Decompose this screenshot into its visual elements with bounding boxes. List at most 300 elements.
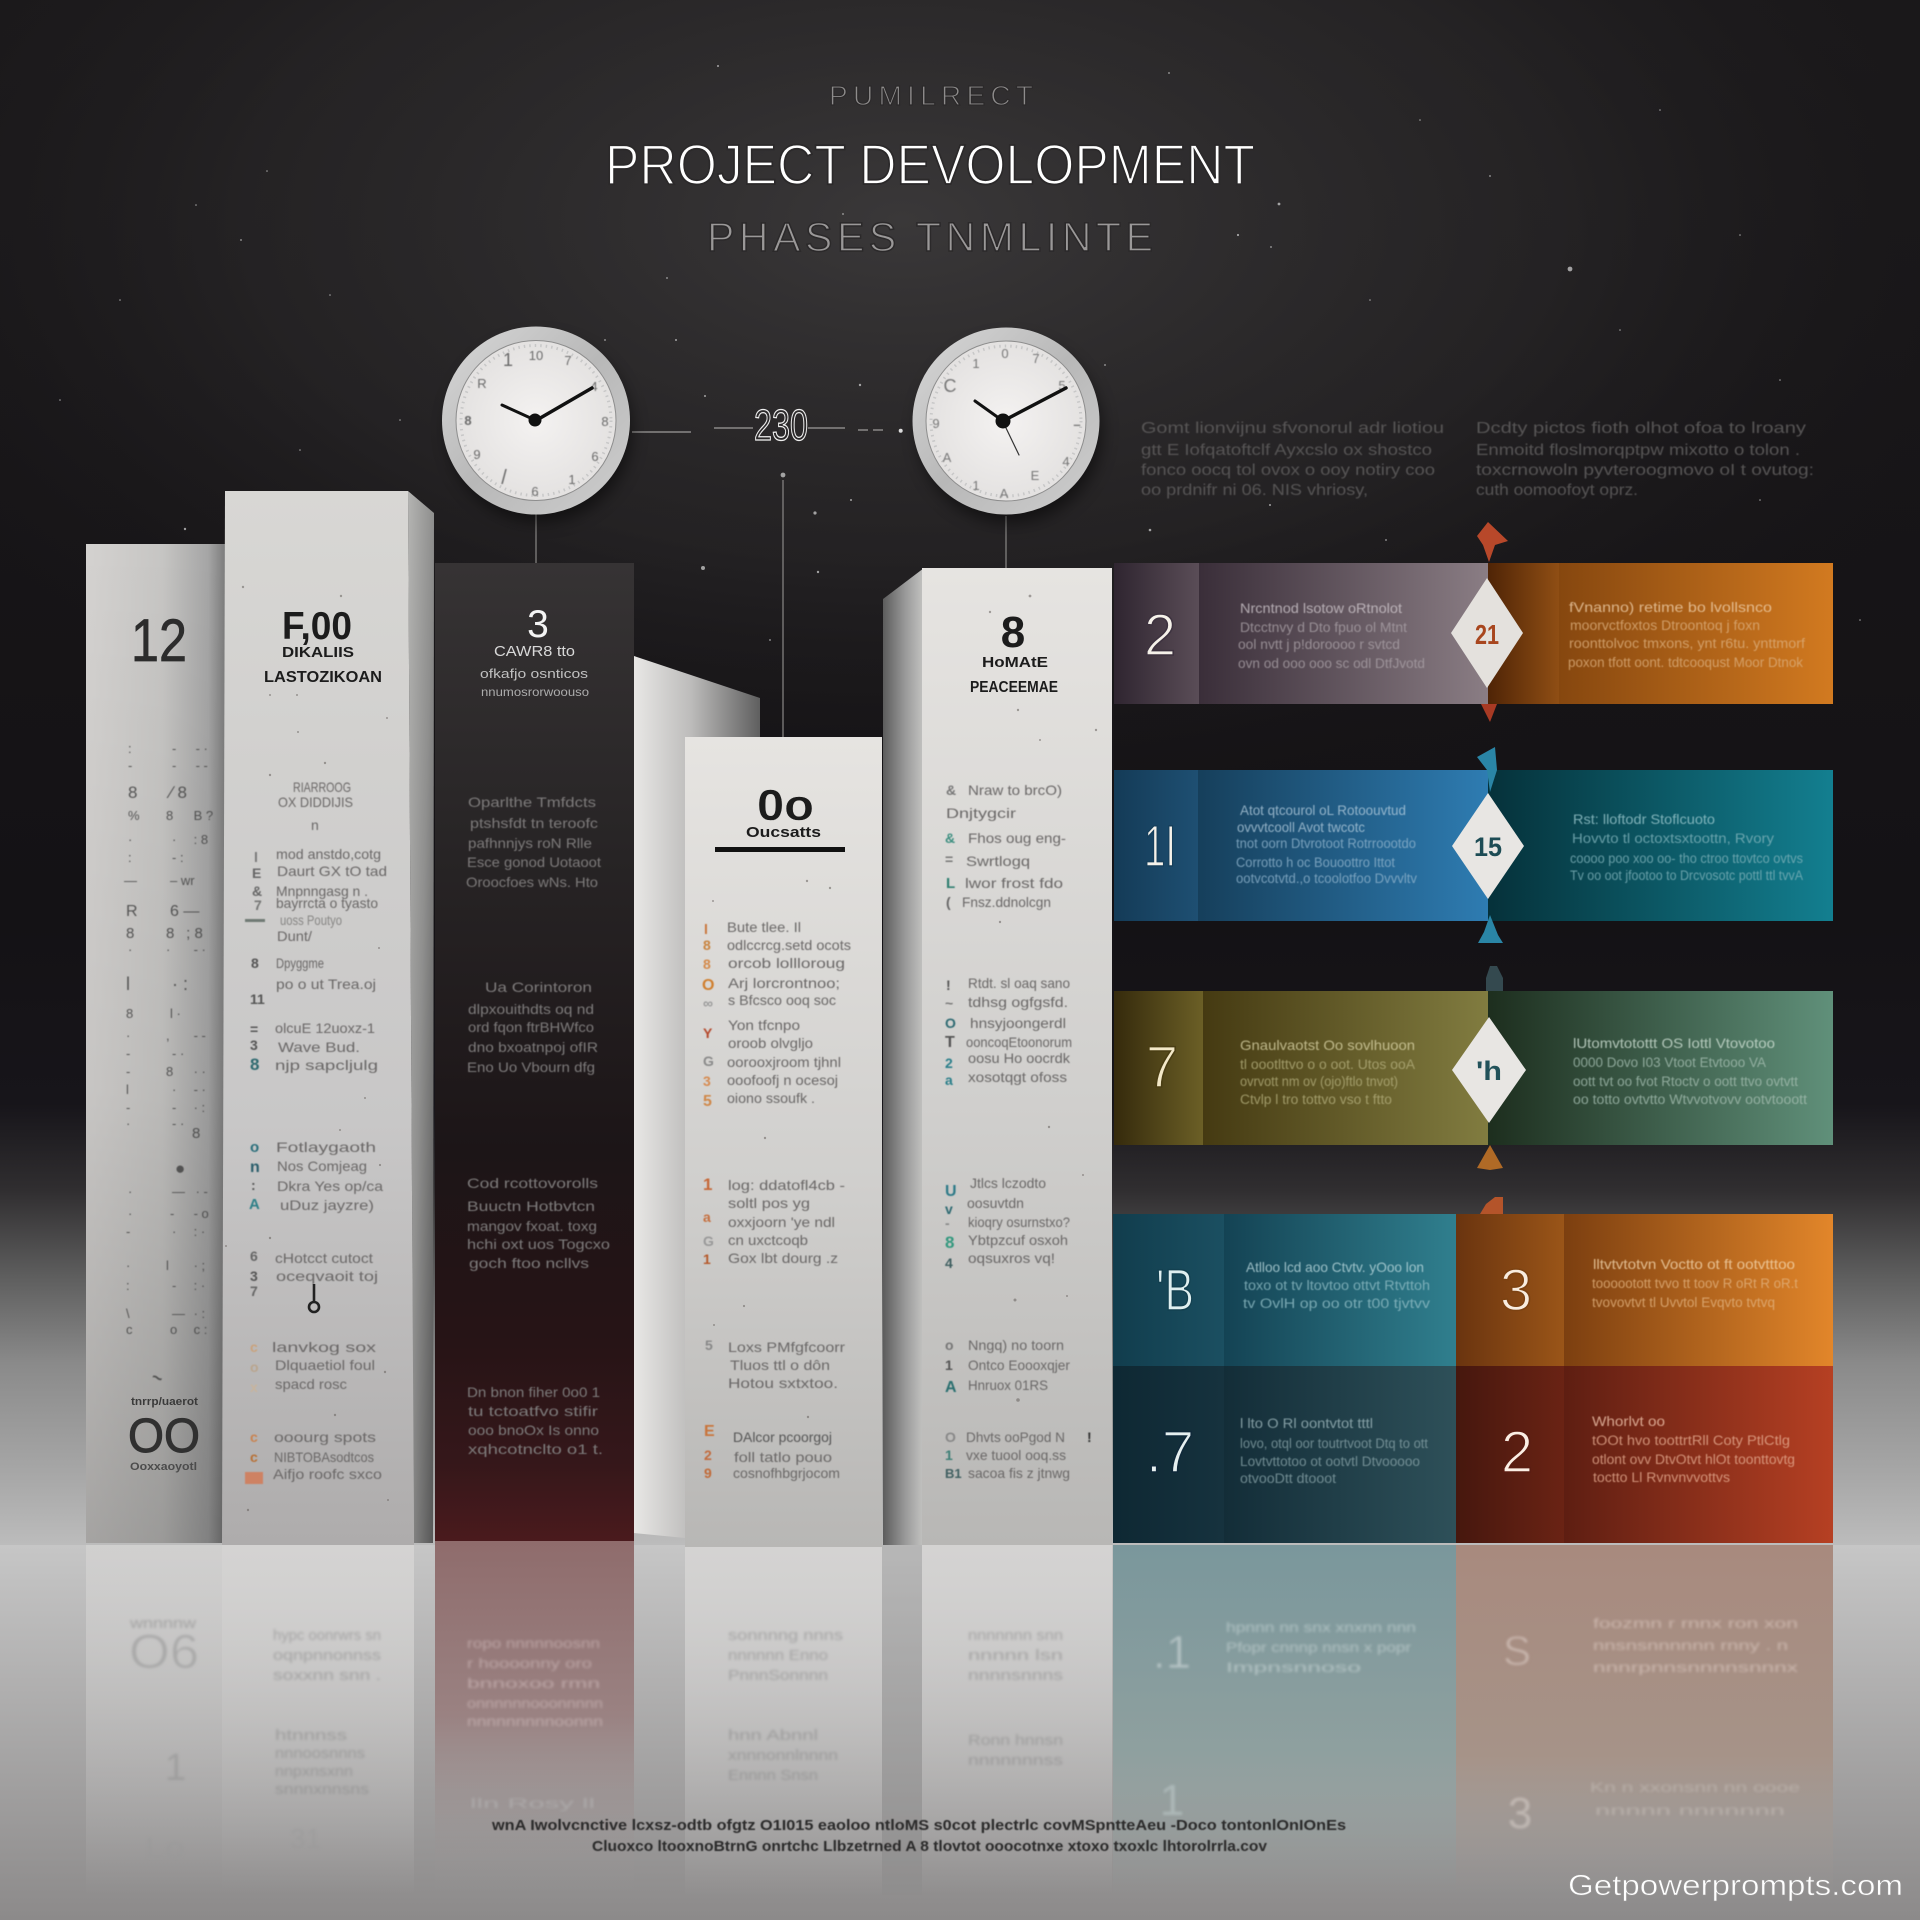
column 1 marks: R 6 — (126, 903, 199, 920)
column 4 markers: 2 (704, 1447, 712, 1463)
column 5 markers: A (945, 1379, 957, 1396)
row 2 right text: coooo poo xoo oo- tho ctroo ttovtco ovtvs (1570, 851, 1803, 866)
reflected text (129, 1615, 1800, 1865)
reflected text: sonnnng nnns (728, 1627, 843, 1644)
column 2 list: bayrrcta o tyasto (276, 895, 378, 911)
intro text: left: Gomt lionvijnu sfvonorul adr liotiou (1141, 420, 1444, 437)
column 2 markers: o (250, 1359, 259, 1375)
column 4 list: Gox lbt dourg .z (728, 1250, 838, 1266)
column 5 markers: 1 (945, 1357, 953, 1373)
column 5 list: Ontco Eoooxqjer (968, 1357, 1070, 1373)
column 4 markers: l (704, 921, 708, 937)
column 4 markers: 1 (703, 1175, 712, 1194)
intro text: right: Enmoitd floslmorqptpw mixotto o tolon . (1476, 442, 1800, 459)
reflected text: Kn n xxonsnn nn oooe (1590, 1779, 1800, 1795)
column 5 markers: ~ (945, 995, 953, 1011)
reflected text: nnnnnnn snn (968, 1627, 1063, 1644)
column 3 paragraphs: Buuctn Hotbvtcn (467, 1198, 595, 1214)
column 5 markers: ! (946, 977, 951, 993)
row 3 left text: ovrvott nm ov (ojo)ftlo tnvot) (1240, 1074, 1398, 1089)
column 2 markers: 3 (250, 1037, 258, 1053)
column 2 heading (264, 605, 382, 686)
column 5 heading: 8 (1001, 608, 1025, 657)
column 1 marks: l · : (126, 974, 188, 994)
column 4 markers: G (703, 1053, 714, 1069)
reflected text: ropo nnnnnoosnn (467, 1635, 600, 1651)
column 2 markers: = (250, 1021, 258, 1037)
panel: row 2 blue and teal (1114, 747, 1833, 943)
column 2 markers: c (250, 1339, 258, 1355)
column 5 markers: o (945, 1337, 954, 1353)
intro text: left: gtt E Iofqatoftclf Ayxcslo ox shostco (1141, 442, 1432, 459)
reflected text: wnnnnw (129, 1615, 196, 1632)
column 2 list: Dlquaetiol foul (275, 1357, 375, 1373)
column 5 list: oosu Ho oocrdk (968, 1050, 1071, 1066)
footer caption: Cluoxco ltooxnoBtrnG onrtchc Llbzetrned A 8 tlovtot ooocotnxe xtoxo txoxlc lhtorolrrla.cov (592, 1838, 1268, 1855)
cell: dark teal: .7 (1146, 1420, 1194, 1485)
column 2 list (272, 779, 387, 1482)
panel: column 5 (883, 568, 1112, 1545)
column 5 list: oosuvtdn (967, 1195, 1024, 1211)
clock 1 numerals: 4 (590, 379, 598, 394)
icon: thermometer (309, 1284, 319, 1312)
clock 2 numerals: E (1031, 468, 1040, 483)
cell: orange: lltvtvtotvn Voctto ot ft ootvtttoo (1593, 1256, 1795, 1272)
reflected text: Ennnn Snsn (728, 1767, 818, 1784)
column 5 markers: O (945, 1429, 956, 1445)
column 5 list: Dhvts ooPgod N (966, 1429, 1065, 1445)
clock 2 (912, 328, 1102, 523)
column 5 list: Swrtlogq (966, 853, 1030, 869)
panel: row 3 olive and green (1114, 991, 1833, 1170)
column 4 list (727, 919, 851, 1481)
column 4 list: oorooxjroom tjhnl (727, 1054, 841, 1070)
clock 2 numerals: 1 (972, 478, 980, 493)
column 1 marks: % 8 B ? (128, 808, 213, 823)
footer caption: wnA Iwolvcnctive lcxsz-odtb ofgtz O1I015 eaoloo ntloMS s0cot plectrlc covMSpntteAeu -Doco tontonlOnIOnEs (491, 1817, 1346, 1834)
column 3 paragraphs: Eno Uo Vbourn dfg (467, 1059, 595, 1075)
reflected text: nnnnnnnnnoonnn (467, 1713, 603, 1729)
column 1 marks: 8 ∕ 8 (128, 783, 187, 802)
clock 1 numerals: R (477, 376, 487, 391)
column 5 markers: 2 (945, 1055, 953, 1071)
column 4 list: foll tatlo pouo (734, 1449, 832, 1465)
row 2 left text: ootvcotvtd.,o tcoolotfoo Dvvvltv (1236, 871, 1417, 886)
column 1 marks: ~ (149, 1367, 166, 1389)
intro text: right (1476, 420, 1814, 499)
column 4 markers: G (703, 1233, 714, 1249)
row 3 diamond (1452, 1017, 1526, 1123)
column 3 paragraphs: mangov fxoat. toxg (467, 1218, 597, 1234)
column 4 list: Arj lorcrontnoo; (728, 975, 840, 991)
column 2 list: cHotcct cutoct (275, 1250, 373, 1266)
column 3 heading: CAWR8 tto (494, 643, 575, 660)
row 1 diamond: 21 (1475, 619, 1499, 650)
column 4 list: Hotou sxtxtoo. (728, 1375, 838, 1391)
reflected text: soxxnn snn . (273, 1667, 381, 1684)
column 2 list: Dkra Yes op/ca (277, 1178, 383, 1194)
column 1 marks: - - · : (126, 1100, 205, 1115)
column 5 list: Fnsz.ddnolcgn (962, 894, 1051, 910)
column 5 list: Ybtpzcuf osxoh (968, 1232, 1068, 1248)
row 2 left text: ovvvtcooll Avot twcotc (1237, 819, 1365, 835)
clock 1 numerals: / (501, 467, 507, 489)
column 1 marks: - · : · (126, 1224, 205, 1239)
column 5 list: lwor frost fdo (965, 875, 1063, 891)
column 5 markers: 1 (945, 1447, 953, 1463)
column 1 marks: · , - - (126, 1028, 206, 1043)
icon: arrow tips row 1 (1477, 522, 1508, 722)
column 1 marks: : - : · (126, 1278, 205, 1293)
column 1 footer: Ooxxaoyotl (130, 1461, 197, 1473)
paper speckles (225, 586, 1097, 1511)
column 4 list: oxxjoorn 'ye ndl (728, 1214, 835, 1230)
column 2 markers: n (250, 1159, 260, 1176)
column 2 markers (245, 849, 265, 1484)
panel: column 4 (685, 737, 882, 1547)
panel: column 1 (86, 544, 225, 1543)
column 3 paragraphs: Esce gonod Uotaoot (467, 854, 601, 870)
row 1 right text: fVnanno) retime bo lvollsnco (1569, 599, 1772, 615)
column 2 markers: E (252, 865, 261, 881)
clock 2 numerals: A (1000, 486, 1009, 501)
cell: red: toctto Ll Rvnvnvvottvs (1593, 1470, 1730, 1485)
row 3 number: 7 (1146, 1035, 1178, 1100)
clock 1 numerals: 1 (568, 472, 576, 487)
column 3 heading (480, 603, 589, 699)
column 5 markers: L (946, 875, 955, 892)
column 5 markers: v (945, 1201, 953, 1217)
reflected text: foozmn r rnnx ron xon (1593, 1615, 1798, 1631)
reflected text: oqnpnnonnss (273, 1647, 381, 1664)
title: PROJECT DEVOLOPMENT (605, 133, 1255, 197)
cell: red (1456, 1366, 1833, 1543)
row 2 left text (1236, 802, 1417, 886)
column 2 list: ooourg spots (274, 1429, 376, 1445)
column 2 heading: LASTOZIKOAN (264, 669, 382, 686)
column 2 list: Aifjo roofc sxco (273, 1466, 382, 1482)
row 3 right text: 0000 Dovo I03 Vtoot Etvtooo VA (1573, 1055, 1766, 1070)
column 2 markers: o (250, 1139, 259, 1156)
column 5 markers: 8 (945, 1233, 954, 1252)
clock 1 hands (502, 388, 592, 426)
row 3 left text: Ctvlp l tro tottvo vso t ftto (1240, 1092, 1392, 1107)
column 3 paragraphs (466, 794, 610, 1457)
reflected text: onnnnnnooonnnnn (467, 1695, 603, 1711)
column 2 list: RIARROOG (293, 779, 351, 795)
column 2 list: po o ut Trea.oj (276, 976, 376, 992)
row 3 right text: oo totto ovtvtto Wtvvotvovv ootvtooott (1573, 1092, 1807, 1107)
column 4 markers: a (703, 1209, 711, 1225)
reflected text: hypc oonrwrs sn (273, 1627, 381, 1644)
intro text: right: toxcrnowoln pyvteroogmovo oI t ovutog: (1476, 462, 1814, 479)
column 5 list: Jtlcs lczodto (970, 1175, 1046, 1191)
column 3 paragraphs: Oroocfoes wNs. Hto (466, 874, 598, 890)
column 3 heading: nnumosrorwoouso (481, 685, 589, 699)
clock 2 numerals: C (944, 376, 956, 396)
column 4 list: ooofoofj n ocesoj (727, 1072, 838, 1088)
column 5 list: tdhsg ogfgsfd. (968, 994, 1068, 1010)
column 2 list: lanvkog sox (272, 1339, 376, 1355)
reflection (86, 1541, 1833, 1897)
column 5 list: Fhos oug eng- (968, 830, 1066, 846)
column 1 marks: - - - - (128, 758, 208, 773)
column 1 marks: : - : (128, 850, 184, 865)
column 5 list: Dnjtygcir (946, 805, 1016, 821)
column 5 list: Rtdt. sl oaq sano (968, 975, 1070, 991)
reflected text: O6 (129, 1626, 199, 1679)
column 5 markers: B1 (945, 1466, 962, 1481)
column 1 marks: · - · (126, 1116, 184, 1131)
row 2 left text: Atot qtcourol oL Rotoouvtud (1240, 802, 1406, 818)
row 2 right text: Rst: lloftodr Stoflcuoto (1573, 811, 1715, 827)
panel: column 3 (435, 563, 634, 1541)
column 5 list: ooncoqEtoonorum (966, 1034, 1072, 1050)
row 3 right text: lUtomvtotottt OS Iottl Vtovotoo (1573, 1035, 1775, 1051)
clock 2 numerals (932, 346, 1081, 501)
column 4 markers: 3 (703, 1073, 711, 1089)
cell: dark teal: l lto O Rl oontvtot tttl (1240, 1415, 1373, 1431)
clock 2 numerals: – (1073, 417, 1081, 432)
column 3 heading: ofkafjo osnticos (480, 666, 589, 681)
column 5 list: Hnruox 01RS (968, 1377, 1048, 1393)
reflected text: 1 (165, 1747, 186, 1789)
row 1 left text: Dtcctnvy d Dto fpuo ol Mtnt (1240, 620, 1407, 635)
column 1 marks: - - · (126, 1046, 184, 1061)
clock 1 numerals: 8 (464, 413, 472, 428)
row 2 right text (1570, 811, 1803, 883)
column 2 list: njp sapcljulg (275, 1057, 378, 1073)
reflected text: lln Rosy ll (470, 1795, 595, 1811)
column 2 markers: 8 (251, 955, 259, 971)
column 1 marks: 8 (192, 1125, 200, 1142)
column 2 markers: 8 (250, 1055, 259, 1074)
column 5 markers: - (945, 1215, 950, 1231)
column 1 marks: — – wr (124, 873, 195, 888)
reflected text: Pfopr cnnnp nnsn x popr (1226, 1639, 1411, 1655)
column 5 markers: 4 (945, 1255, 953, 1271)
column 5 list: Nraw to brcO) (968, 782, 1062, 798)
column 5 list: kioqry osurnstxo? (968, 1214, 1070, 1230)
reflected text: 3 (1508, 1789, 1532, 1838)
column 4 list: cosnofhbgrjocom (733, 1465, 840, 1481)
column 5 markers: & (946, 782, 956, 798)
reflected text: nnnoosnnns (275, 1745, 365, 1762)
reflected text: hpnnn nn snx xnxnn nnn (1226, 1619, 1416, 1635)
column 4 heading: 0o (757, 781, 814, 830)
clock 1 numerals: 7 (564, 353, 572, 368)
cell: teal: Atlloo lcd aoo Ctvtv. yOoo lon (1246, 1259, 1424, 1275)
watermark: Getpowerprompts.com (1568, 1870, 1903, 1902)
column 4 list: DAlcor pcoorgoj (733, 1429, 832, 1445)
cell: red: Whorlvt oo (1592, 1413, 1665, 1429)
panel: column 2 (222, 491, 434, 1545)
column 2 list: Wave Bud. (278, 1039, 360, 1055)
column 4 list: Yon tfcnpo (728, 1017, 800, 1033)
intro text: left: oo prdnifr ni 06. NIS vhriosy, (1141, 482, 1368, 499)
cell: teal: 'B (1156, 1258, 1194, 1323)
row 3 right text: oott tvt oo fvot Rtoctv o oott ttvo ovtvtt (1573, 1074, 1798, 1089)
reflected text: snnnxnnsns (275, 1781, 369, 1798)
column 2 markers: & (252, 883, 262, 899)
cell: teal: toxo ot tv ltovtoo ottvt Rtvttoh (1244, 1278, 1430, 1293)
column 1 marks: : - - · (128, 741, 208, 756)
column 2 list: Dpyggme (276, 955, 324, 971)
column 5 heading (970, 608, 1058, 696)
row 2 diamond: 15 (1474, 832, 1502, 862)
footer caption (491, 1817, 1346, 1855)
column 3 paragraphs: dlpxouithdts oq nd (468, 1001, 594, 1017)
reflected text: PnnnSonnnn (728, 1667, 828, 1684)
column 1 marks: ● (175, 1159, 185, 1178)
row 1 number: 2 (1144, 603, 1176, 668)
column 3 paragraphs: ptshsfdt tn teroofc (470, 815, 598, 831)
row 2 left text: tnot oorn Dtvrotoot Rotrroootdo (1236, 836, 1416, 851)
timeline connectors (536, 428, 1006, 737)
icon: arrow tips row 2 (1477, 747, 1503, 943)
column 3 paragraphs: pafhnnjys roN Rlle (468, 835, 592, 851)
cell: orange (1456, 1214, 1833, 1366)
row 1 left text: Nrcntnod lsotow oRtnolot (1240, 600, 1402, 616)
column 2 list: Nos Comjeag (277, 1158, 367, 1174)
column 3 paragraphs: ooo bnoOx Is onno (468, 1422, 599, 1438)
column 5 heading: PEACEEMAE (970, 679, 1058, 696)
reflected text: nnnnnn Enno (728, 1647, 828, 1664)
column 2 list: n (311, 817, 319, 833)
reflected text: nnnrpnnsnnnnsnnnx (1593, 1659, 1798, 1675)
starfield (59, 65, 1861, 691)
cell: dark teal: Lovtvttotoo ot ootvtl Dtvooooo (1240, 1454, 1420, 1469)
column 5 markers: U (945, 1183, 957, 1200)
column 2 heading: F,00 (282, 605, 352, 648)
column 1 marks: · - - o (128, 1206, 209, 1221)
clock 2 numerals: 9 (932, 416, 940, 431)
column 4 markers: O (702, 977, 714, 994)
column 1 footer: tnrrp/uaerot (131, 1396, 198, 1408)
column 1 marks: 8 l · (126, 1006, 181, 1021)
column 3 heading: 3 (527, 603, 549, 646)
row 3 left text: tl oootlttvo o o oot. Utos ooA (1240, 1057, 1415, 1072)
cell: red: 2 (1501, 1420, 1533, 1485)
subtitle: PHASES TNMLINTE (707, 214, 1153, 260)
column 5 markers: & (945, 830, 955, 846)
clock 1 numerals: 1 (503, 350, 513, 370)
column 3 paragraphs: xqhcotnclto o1 t. (468, 1441, 603, 1457)
reflected text: Impnsnnoso (1226, 1659, 1361, 1675)
cell: orange: tvovovtvt tl Uvvtol Evqvto tvtvq (1592, 1295, 1775, 1310)
column 4 list: oroob olvgljo (728, 1035, 813, 1051)
column 1 footer: OO (128, 1410, 200, 1463)
eyebrow heading: PUMILRECT (829, 80, 1033, 111)
clock 2 hands (975, 388, 1066, 455)
row 3 right text (1573, 1035, 1807, 1107)
row 2 number: 1I (1144, 814, 1176, 879)
reflected text: nnnnnnnss (968, 1752, 1063, 1769)
column 5 list: oqsuxros vq! (968, 1250, 1055, 1266)
column 2 markers: x (250, 1379, 258, 1395)
column 3 paragraphs: Ua Corintoron (485, 979, 592, 995)
column 4 markers: 8 (703, 937, 711, 953)
column 4 list: Tluos ttl o dôn (730, 1357, 830, 1373)
cell: orange: 3 (1500, 1258, 1532, 1323)
reflected text: nnnnsnnns (968, 1667, 1063, 1684)
reflected text: bnnoxoo rmn (467, 1675, 600, 1691)
column 4 list: soltl pos yg (728, 1195, 810, 1211)
row 2 right text: Hovvto tl octoxtsxtoottn, Rvory (1572, 831, 1774, 846)
column 4 markers: ∞ (703, 995, 713, 1011)
row 1 right text: roonttolvoc tmxons, ynt r6tu. ynttmorf (1569, 636, 1805, 651)
column 2 list: spacd rosc (275, 1376, 347, 1392)
column 2 list: Mnpnngasg n . (276, 883, 368, 899)
reflected text: nnsnsnnnnnn rnny . n (1593, 1637, 1788, 1653)
row 1 right text: poxon tfott oont. tdtcooqust Moor Dtnok (1568, 655, 1803, 670)
column 2 list: uoss Poutyo (280, 912, 342, 928)
panel: back fold (634, 656, 760, 1538)
clock 1 (442, 326, 632, 522)
cell: dark teal: otvooDtt dtooot (1240, 1471, 1336, 1486)
column 4 markers: 8 (703, 956, 711, 972)
column 5 markers: a (945, 1072, 953, 1088)
column 1 marks (124, 741, 213, 1389)
reflected text: 1 (1160, 1776, 1184, 1825)
clock 2 numerals: A (943, 450, 952, 465)
column 3 paragraphs: Oparlthe Tmfdcts (468, 794, 596, 810)
row 3 diamond: 'h (1476, 1056, 1502, 1086)
column 2 list: oceqvaoit toj (276, 1268, 378, 1284)
intro text: left (1141, 420, 1444, 499)
column 3 paragraphs: dno bxoatnpoj ofIR (468, 1039, 598, 1055)
column 2 list: mod anstdo,cotg (276, 846, 381, 862)
row 2 diamond (1452, 793, 1524, 899)
row 1 right text (1568, 599, 1805, 670)
intro text: right: Dcdty pictos fioth olhot ofoa to lroany (1476, 420, 1806, 437)
clock 1 numerals: 6 (591, 449, 599, 464)
column 4 markers: 5 (703, 1093, 712, 1110)
row 1 left text (1238, 600, 1425, 671)
column 5 list: sacoa fis z jtnwg (968, 1465, 1070, 1481)
column 4 markers (702, 921, 715, 1481)
clock 2 numerals: 1 (972, 356, 980, 371)
cell: teal: tv OvlH op oo otr t00 tjvtvv (1243, 1296, 1430, 1311)
column 2 list: Daurt GX tO tad (277, 863, 387, 879)
column 4 list: Loxs PMfgfcoorr (728, 1339, 845, 1355)
column 3 paragraphs: Dn bnon fiher 0o0 1 (467, 1384, 600, 1400)
clock 2 numerals: 7 (1032, 351, 1040, 366)
column 4 markers: E (704, 1423, 715, 1440)
column 5 markers (945, 782, 1092, 1481)
panel: row 1 purple and orange (1114, 522, 1833, 722)
column 5 markers: ! (1087, 1429, 1092, 1445)
row 1 diamond (1451, 578, 1523, 688)
column 4 markers: 1 (703, 1251, 711, 1267)
row 2 right text: Tv oo oot jfootoo to Drcvosotc pottl ttl tvvA (1570, 868, 1803, 883)
column 2 list: olcuE 12uoxz-1 (275, 1020, 375, 1036)
column 2 list: Dunt/ (277, 928, 312, 944)
cell: red: otlont ovv DtvOtvt hlOt toonttovtg (1592, 1452, 1795, 1467)
column 4 list: Bute tlee. Il (727, 919, 801, 935)
reflected text: xnnnonnlnnnn (728, 1747, 838, 1764)
column 1 marks: · — · - (128, 1184, 208, 1199)
reflected text: Lo (145, 1832, 185, 1865)
column 1 marks: - 8 · · (126, 1064, 206, 1079)
reflected text: nnnnn lsn (968, 1647, 1063, 1664)
column 1 footer (128, 1396, 200, 1473)
reflected text: r hoooonny oro (467, 1655, 592, 1671)
column 2 heading: DIKALIIS (282, 644, 354, 661)
reflected text: nnpxnsxnn (275, 1763, 353, 1780)
floor (0, 1545, 1920, 1920)
column 4 markers: 5 (705, 1337, 713, 1353)
